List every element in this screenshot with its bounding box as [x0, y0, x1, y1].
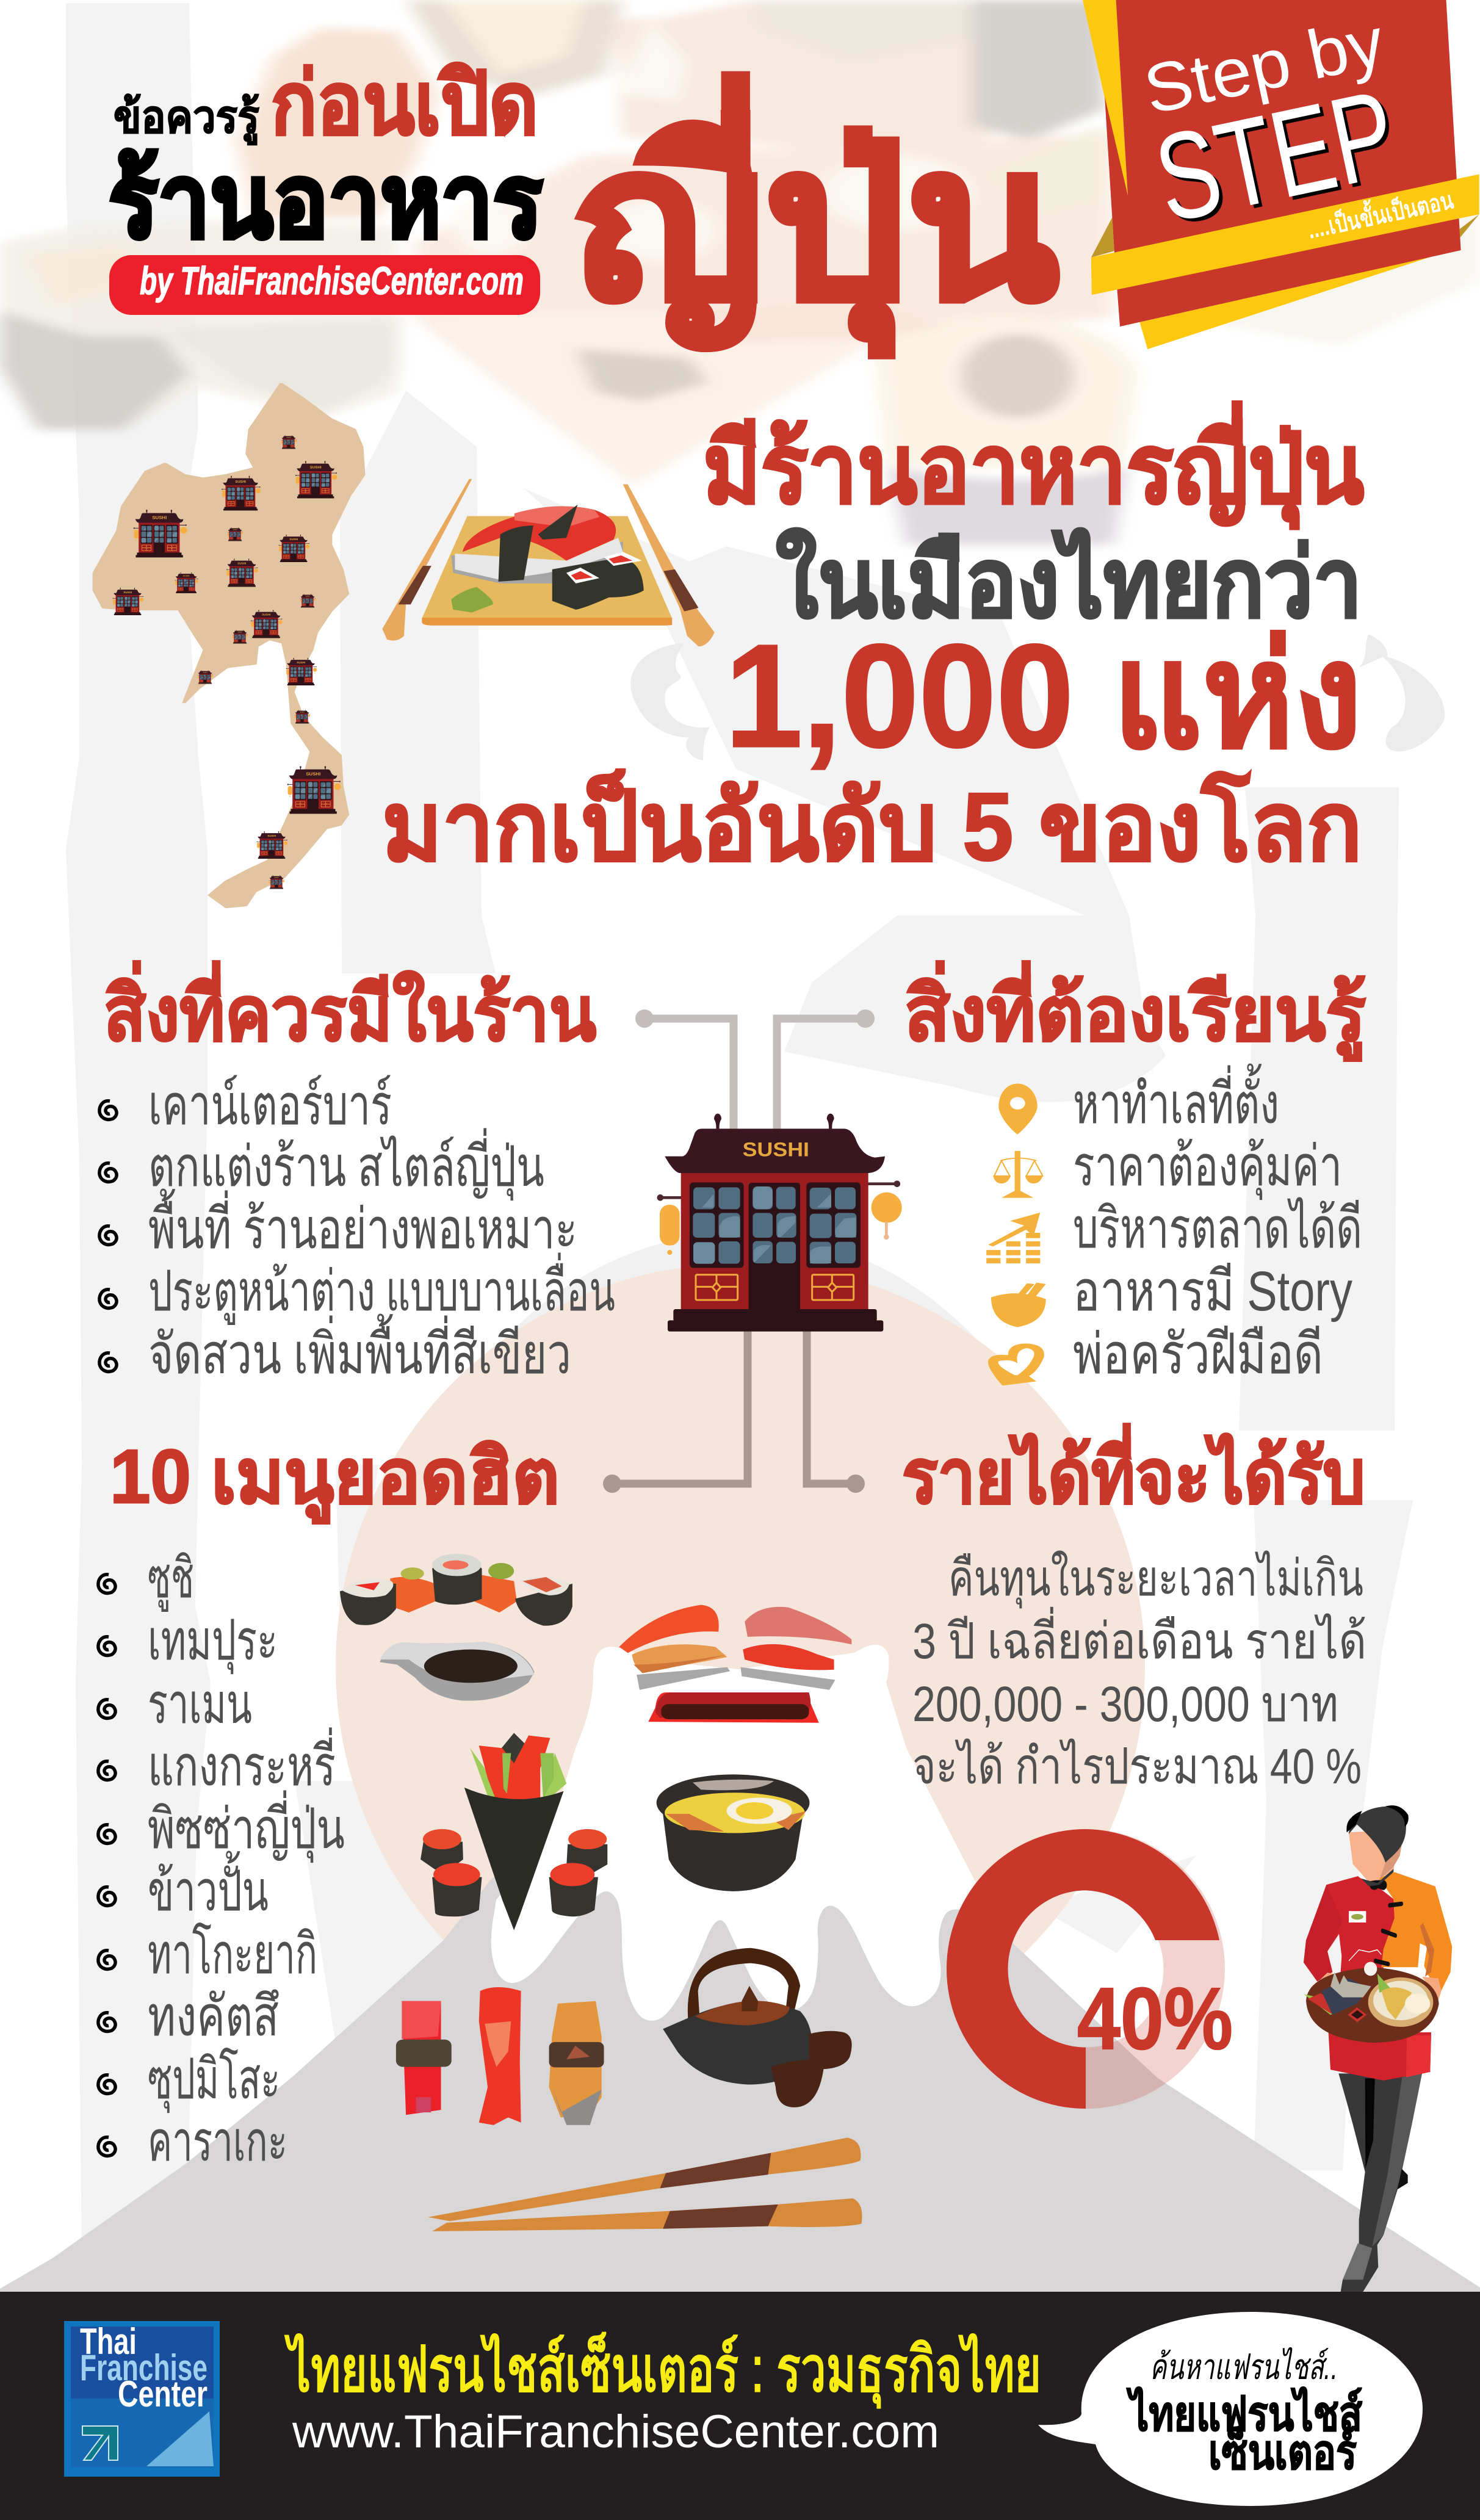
headline: 1,000 แห่ง: 1,000 แห่ง [725, 614, 1362, 778]
income paragraph: จะได้ กำไรประมาณ 40 % [912, 1739, 1362, 1794]
background: koi fish left and right [630, 634, 1445, 760]
heading: 10 เมนูยอดฮิต: 10 เมนูยอดฮิต [110, 1435, 560, 1523]
food: chopsticks [428, 2138, 862, 2231]
donut chart: 40 percent: 40% [1077, 1969, 1233, 2068]
list: top 10 menu: ซูชิ [148, 1547, 194, 1612]
food illustrations [340, 1554, 862, 2231]
footer: yellow tagline: ไทยแฟรนไชส์เซ็นเตอร์ : รวมธุรกิจไทย [285, 2332, 1041, 2408]
background: grey mountain [0, 1739, 1480, 2295]
list: things to learn: อาหารมี Story [1073, 1260, 1352, 1323]
list: top 10 menu: ทาโกะยากิ [148, 1922, 317, 1985]
list: things to learn: ราคาต้องคุ้มค่า [1073, 1135, 1342, 1200]
background: faded food photo [0, 0, 1480, 544]
icon: growth chart [986, 1213, 1040, 1263]
byline pill [109, 255, 540, 315]
sushi plate with chopsticks [382, 479, 715, 646]
title: ญี่ปุ่น: ญี่ปุ่น [574, 74, 1059, 357]
heading: สิ่งที่ควรมีในร้าน: สิ่งที่ควรมีในร้าน [104, 961, 596, 1056]
icon: location pin [998, 1084, 1038, 1135]
title: ก่อนเปิด: ก่อนเปิด [271, 56, 538, 153]
speech bubble: ไทยแฟรนไชส์ [1126, 2386, 1362, 2441]
list: top 10 menu: ซุปมิโสะ [148, 2048, 280, 2114]
heading: สิ่งที่ต้องเรียนรู้: สิ่งที่ต้องเรียนรู้ [904, 961, 1366, 1061]
food: ramen bowl [657, 1774, 809, 1891]
icons: orange learning icons [986, 1084, 1046, 1385]
income paragraph: คืนทุนในระยะเวลาไม่เกิน [948, 1551, 1363, 1609]
list: things the shop should have [99, 1074, 615, 1385]
list: things to learn [1073, 1063, 1362, 1385]
list: top 10 menu: พิซซ่าญี่ปุ่น [148, 1790, 345, 1863]
food: small maki rolls [421, 1829, 607, 1916]
speech bubble: เซ็นเตอร์ [1208, 2424, 1357, 2479]
footer logo: Thai Franchise Center: Center [118, 2374, 208, 2414]
byline pill: by ThaiFranchiseCenter.com [140, 259, 524, 303]
icon: chef hat [988, 1343, 1044, 1385]
speech bubble [1038, 2312, 1423, 2506]
list: top 10 menu: คาราเกะ [148, 2110, 287, 2173]
food: nigiri pair on tray [619, 1605, 851, 1723]
list: things the shop should have: จัดสวน เพิ่มพื้นที่สีเขียว [148, 1313, 571, 1385]
food: sushi roll row [340, 1554, 572, 1626]
central sushi shop [657, 1114, 902, 1332]
connector lines [603, 1009, 875, 1493]
badge: step by step: STEP [1144, 63, 1407, 249]
headline: ในเมืองไทยกว่า: ในเมืองไทยกว่า [776, 528, 1362, 637]
income paragraph: 3 ปี เฉลี่ยต่อเดือน รายได้ [912, 1606, 1366, 1669]
list: top 10 menu: ข้าวปั้น [148, 1850, 269, 1922]
background: peach sun circle [336, 1263, 1145, 2069]
list: top 10 menu: แกงกระหรี่ [148, 1727, 336, 1797]
icon: bowl [991, 1283, 1046, 1327]
headline: มากเป็นอันดับ 5 ของโลก: มากเป็นอันดับ 5 ของโลก [382, 769, 1362, 881]
footer bar [0, 2292, 1480, 2520]
income paragraph: 200,000 - 300,000 บาท [912, 1677, 1338, 1732]
list: things the shop should have: ประตูหน้าต่าง แบบบานเลื่อน [148, 1252, 615, 1325]
badge: step by step [1083, 0, 1479, 349]
food: three nigiri pieces [396, 1987, 604, 2125]
list: things to learn: บริหารตลาดได้ดี [1073, 1197, 1362, 1260]
list: top 10 menu [98, 1547, 345, 2173]
donut chart: 40 percent [947, 1829, 1233, 2109]
waitress carrying tray [1304, 1805, 1452, 2292]
headline: มีร้านอาหารญี่ปุ่น: มีร้านอาหารญี่ปุ่น [703, 401, 1364, 529]
footer logo: Thai Franchise Center [64, 2321, 220, 2477]
icon: scales [993, 1151, 1043, 1198]
list: things the shop should have: ตกแต่งร้าน สไตล์ญี่ปุ่น [148, 1128, 544, 1201]
speech bubble: ค้นหาแฟรนไชส์.. [1150, 2347, 1338, 2387]
background: white mountain snowcap [491, 1645, 1001, 2021]
footer logo: Thai Franchise Center: Thai [80, 2321, 137, 2362]
list: top 10 menu: เทมปุระ [148, 1609, 278, 1675]
title: ร้านอาหาร: ร้านอาหาร [109, 144, 543, 259]
map of Thailand with shops [95, 384, 363, 908]
list: things the shop should have: เคาน์เตอร์บาร์ [148, 1074, 392, 1136]
footer logo: Thai Franchise Center: Franchise [80, 2347, 208, 2388]
list: things the shop should have: พื้นที่ ร้านอย่างพอเหมาะ [148, 1188, 577, 1260]
background: pale circle arc [380, 1233, 1100, 2099]
heading: รายได้ที่จะได้รับ: รายได้ที่จะได้รับ [902, 1423, 1365, 1519]
list: things to learn: หาทำเลที่ตั้ง [1073, 1063, 1279, 1135]
title: ข้อควรรู้: ข้อควรรู้ [114, 92, 259, 145]
food: teapot and cups [663, 1948, 852, 2107]
food: temaki hand roll [464, 1733, 566, 1930]
footer: website url: www.ThaiFranchiseCenter.com [292, 2406, 939, 2458]
food: soy sauce dish [380, 1642, 535, 1701]
badge: step by step: Step by [1138, 3, 1391, 128]
list: things to learn: พ่อครัวฝีมือดี [1073, 1323, 1323, 1385]
income paragraph [912, 1551, 1366, 1794]
list: top 10 menu: ราเมน [148, 1673, 252, 1735]
list: top 10 menu: ทงคัตสึ [148, 1985, 279, 2048]
